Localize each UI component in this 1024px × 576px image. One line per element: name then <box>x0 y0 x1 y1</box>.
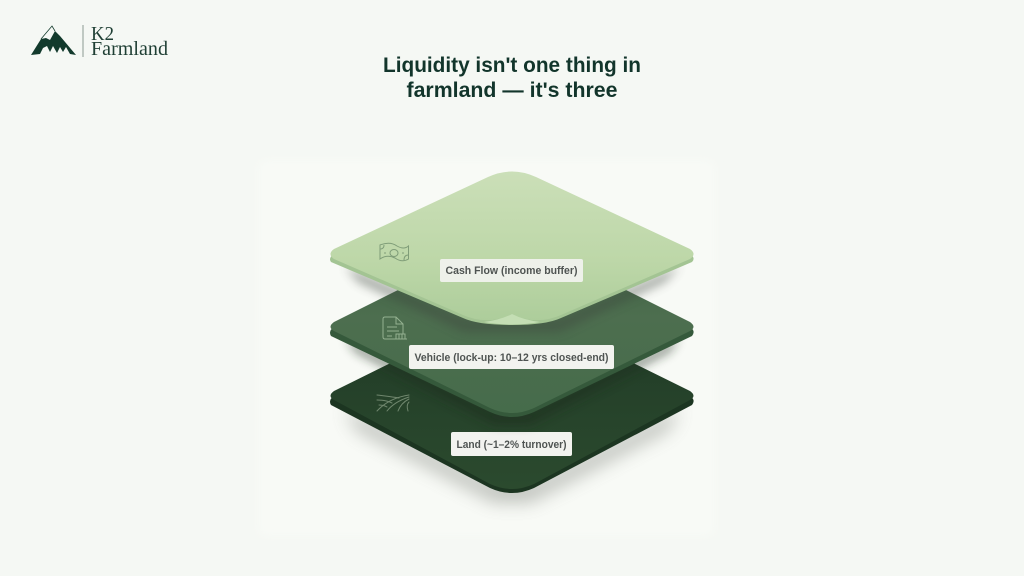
land plate top surface <box>330 309 694 489</box>
logo: K2 Farmland <box>31 23 168 60</box>
cash flow plate side edge <box>330 254 694 325</box>
label: land <box>451 432 572 456</box>
layer: Cash Flow <box>330 172 694 332</box>
title: farmland — it's three <box>406 78 618 102</box>
logo wordmark: Farmland <box>91 38 168 60</box>
label: cash flow <box>440 259 583 282</box>
icon: banknote <box>380 243 408 261</box>
layer: Vehicle <box>330 239 694 425</box>
title: Liquidity isn't one thing in <box>383 53 641 77</box>
icon: mountain <box>31 26 76 55</box>
vehicle plate top surface <box>330 239 694 413</box>
layer: Land <box>330 309 694 502</box>
icon: field rows <box>377 395 409 411</box>
label: vehicle: Vehicle (lock-up: 10–12 yrs closed-end) <box>414 352 609 364</box>
label: cash flow: Cash Flow (income buffer) <box>446 265 578 277</box>
logo wordmark: K2 <box>91 23 114 45</box>
logo wordmark <box>91 23 168 60</box>
land plate side edge <box>330 396 694 493</box>
title <box>383 53 641 102</box>
vehicle plate side edge <box>330 327 694 417</box>
cash flow plate top surface <box>330 172 694 320</box>
label: land: Land (~1–2% turnover) <box>456 439 567 451</box>
notch highlight <box>484 314 540 324</box>
icon: document with building <box>383 317 407 339</box>
label: vehicle <box>409 345 614 369</box>
